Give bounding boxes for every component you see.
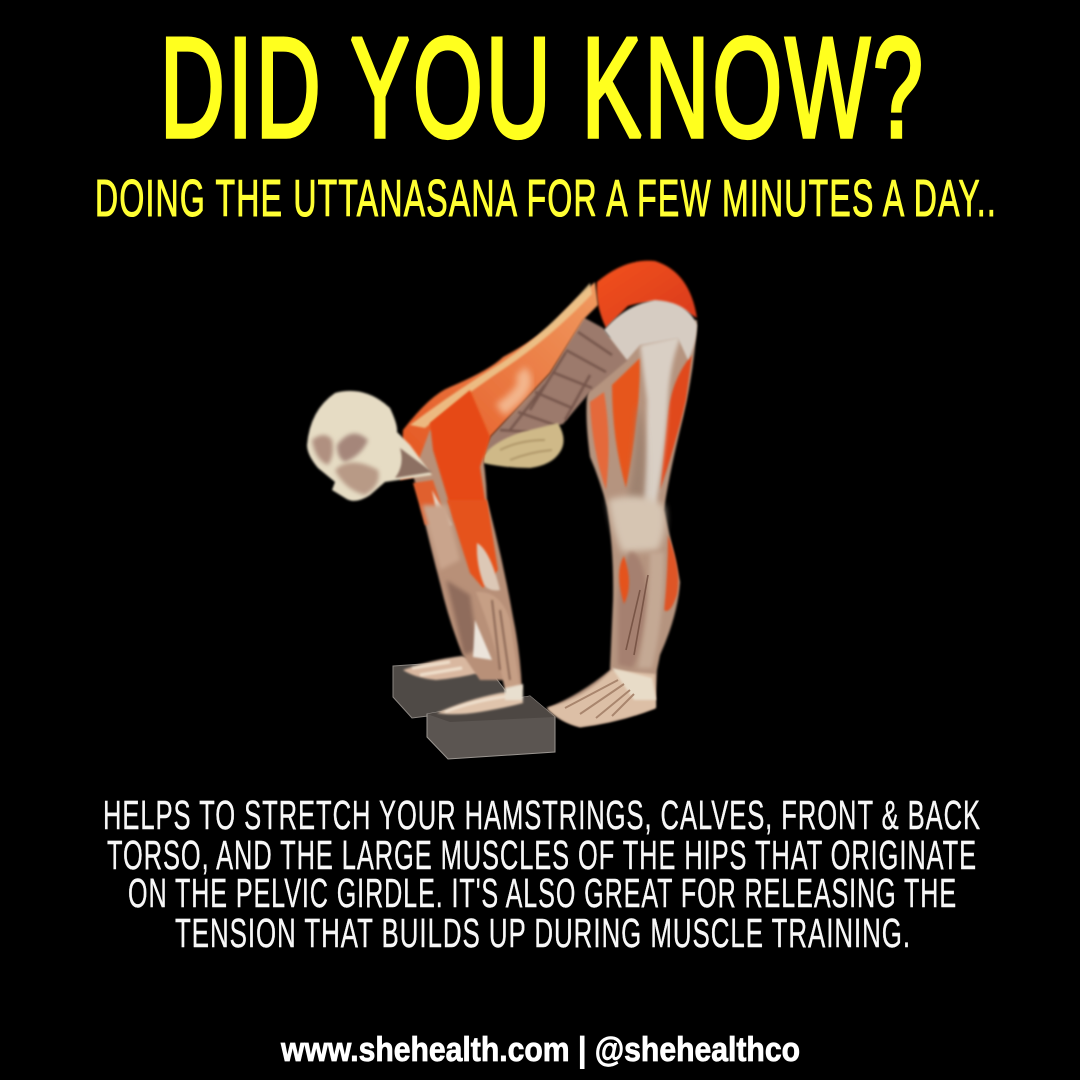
arm — [413, 390, 522, 690]
back muscles — [400, 282, 598, 480]
back leg and thigh — [547, 320, 697, 727]
footer: website and handle: www.shehealth.com | @shehealthco — [280, 1031, 800, 1069]
illustration: anatomical forward fold on blocks — [307, 261, 697, 759]
shoulder deltoid — [430, 390, 490, 522]
white tendon wedge — [473, 620, 492, 660]
thigh: orange quadriceps — [590, 392, 609, 490]
hip pale band — [604, 300, 697, 360]
glute muscle — [597, 261, 697, 328]
near hand — [437, 684, 523, 714]
thigh: pale tendon band — [640, 335, 682, 515]
calf muscles — [618, 552, 648, 668]
torso: ribs and abdomen — [482, 317, 628, 468]
belly — [483, 423, 564, 468]
forearm orange — [447, 500, 498, 588]
foot — [547, 670, 656, 727]
face muscles — [312, 435, 333, 465]
head — [307, 391, 432, 501]
icon: far yoga block — [393, 660, 505, 718]
far hand — [403, 656, 482, 680]
body text — [103, 792, 981, 956]
knee — [608, 496, 665, 552]
icon: near yoga block — [427, 696, 555, 759]
